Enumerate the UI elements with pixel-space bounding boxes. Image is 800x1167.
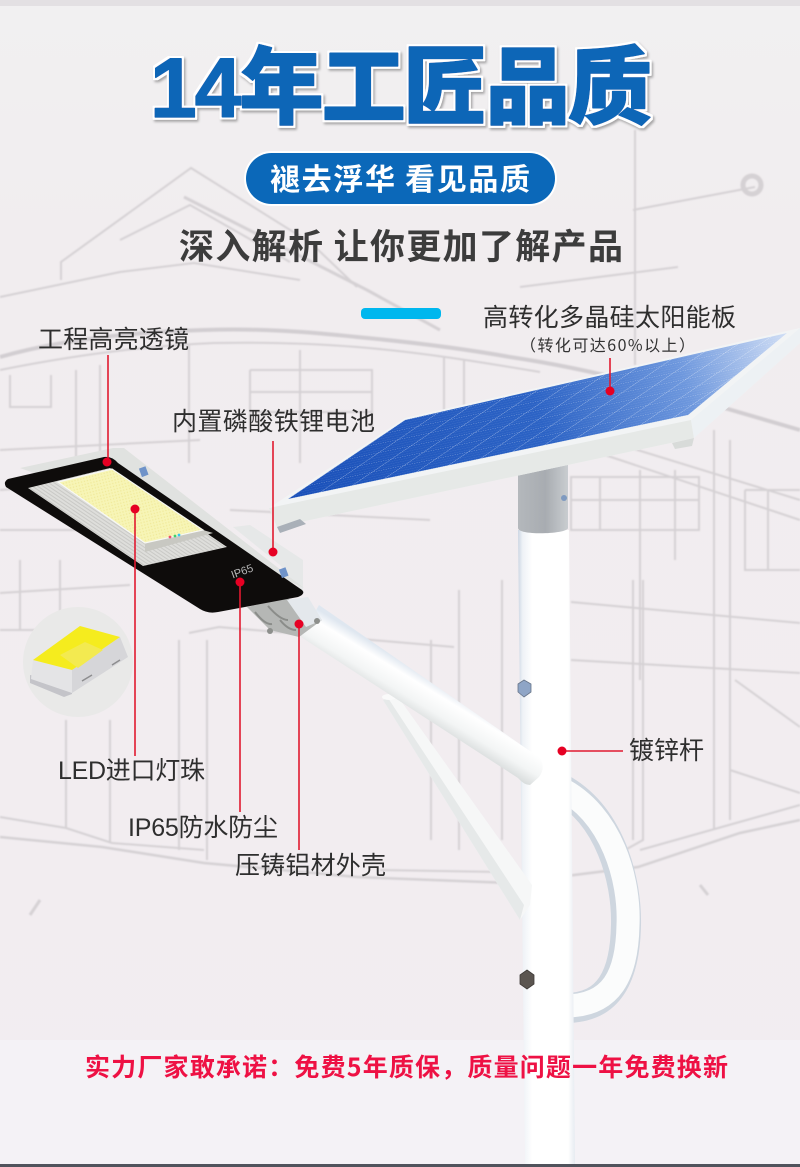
LED chip closeup <box>23 607 133 717</box>
chip backdrop <box>23 607 133 717</box>
callout: IP65 <box>128 578 278 842</box>
title: 14年工匠品质 <box>150 41 652 135</box>
street lamp <box>5 448 322 637</box>
subtitle pill <box>244 151 557 206</box>
LED array <box>58 469 203 543</box>
callout: battery <box>172 402 375 556</box>
curved cable tube <box>560 788 628 1008</box>
callout: IP65: IP65防水防尘 <box>128 814 278 842</box>
callout: solar panel: （转化可达60%以上） <box>520 332 695 356</box>
battery box <box>233 525 303 592</box>
pole cap <box>518 463 568 533</box>
callout: galvanized pole <box>558 731 704 767</box>
subtitle pill: 褪去浮华 看见品质 <box>270 155 530 199</box>
cyan accent bar <box>361 308 441 319</box>
pole shaft <box>518 530 575 1164</box>
lamp housing <box>20 448 304 588</box>
solar cells <box>288 333 787 499</box>
upper bolt <box>518 680 531 697</box>
callout: lens: 工程高亮透镜 <box>38 320 189 356</box>
bottom light band <box>0 1040 800 1164</box>
warranty promise: 实力厂家敢承诺：免费5年质保，质量问题一年免费换新 <box>85 1048 728 1084</box>
pole <box>518 463 575 1164</box>
bottom edge <box>0 1164 800 1167</box>
mounting clips <box>139 466 289 578</box>
callout: aluminium shell <box>235 620 386 882</box>
callout: solar panel: 高转化多晶硅太阳能板 <box>483 298 736 334</box>
callout: lens <box>38 320 189 466</box>
callout: battery: 内置磷酸铁锂电池 <box>172 402 375 438</box>
black lamp body <box>5 457 303 613</box>
IP65 mark: IP65 <box>230 562 255 581</box>
callout: solar panel <box>483 298 736 396</box>
support brace <box>382 694 532 920</box>
lens base <box>28 468 227 566</box>
callout: LED beads <box>58 504 205 785</box>
arm <box>301 605 543 785</box>
callout: aluminium shell: 压铸铝材外壳 <box>235 846 386 882</box>
lamp bracket <box>247 597 322 637</box>
callout: LED beads: LED进口灯珠 <box>58 757 205 785</box>
callout: galvanized pole: 镀锌杆 <box>629 731 704 767</box>
solar panel <box>269 328 800 533</box>
panel frame <box>269 328 800 527</box>
lower bolt <box>520 970 534 989</box>
indicator lights <box>169 534 180 538</box>
pole bolts <box>518 680 534 989</box>
section heading: 深入解析 让你更加了解产品 <box>179 219 623 270</box>
background house sketch <box>0 130 800 915</box>
